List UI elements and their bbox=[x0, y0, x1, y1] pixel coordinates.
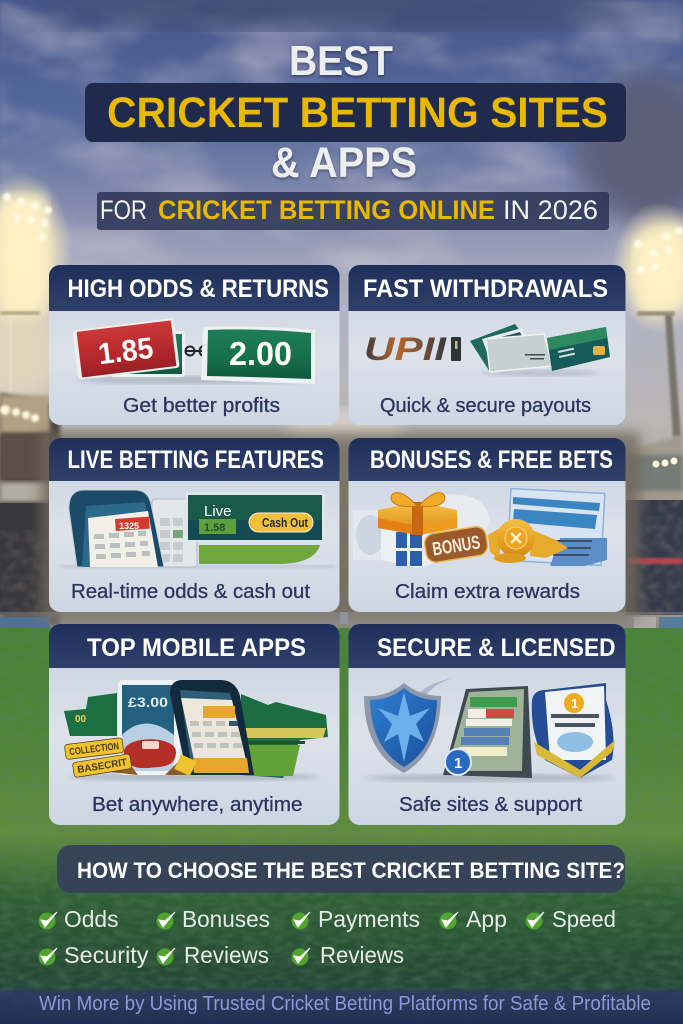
title line: apps: & APPS bbox=[271, 139, 417, 187]
title line: best: BEST bbox=[289, 37, 393, 84]
item: speed bbox=[526, 906, 616, 932]
subtitle banner: FOR bbox=[100, 195, 147, 225]
subtitle banner bbox=[97, 192, 609, 230]
item: app: App bbox=[466, 906, 507, 932]
caption: Claim extra rewards bbox=[395, 581, 580, 603]
icon: phones, tickets and green banners: £3.00 bbox=[128, 694, 168, 710]
icon: shield, checklist and certificate bbox=[364, 678, 615, 782]
caption: Quick & secure payouts bbox=[380, 395, 591, 417]
item: speed: Speed bbox=[552, 906, 616, 932]
item: reviews repeated: Reviews bbox=[320, 942, 404, 968]
item: reviews: Reviews bbox=[184, 942, 269, 968]
left stand bbox=[0, 393, 60, 628]
icon: upi logo and bank cards bbox=[364, 324, 610, 376]
item: app bbox=[440, 906, 507, 932]
caption: Get better profits bbox=[123, 395, 280, 417]
icon: phones, tickets and green banners: BASECRIT bbox=[77, 757, 128, 776]
heading: LIVE BETTING FEATURES bbox=[68, 446, 324, 474]
icon: shield, checklist and certificate: 1 bbox=[454, 755, 462, 772]
icon: odds tickets: 2.00 bbox=[229, 335, 292, 372]
heading: HIGH ODDS & RETURNS bbox=[68, 275, 329, 303]
icon: phone and live odds card: Live bbox=[204, 503, 232, 520]
panel: high odds and returns bbox=[49, 265, 340, 425]
title bbox=[85, 37, 626, 230]
icon: phone and live odds card: 1.58 bbox=[204, 522, 225, 534]
heading: FAST WITHDRAWALS bbox=[363, 275, 608, 303]
heading: TOP MOBILE APPS bbox=[87, 634, 306, 662]
panel: secure and licensed bbox=[348, 624, 626, 825]
item: security: Security bbox=[64, 942, 149, 968]
icon: upi logo and bank cards: UPII bbox=[364, 331, 447, 367]
left floodlight bbox=[0, 172, 72, 395]
icon: phone and live odds card: Cash Out bbox=[262, 515, 309, 530]
subtitle banner: IN 2026 bbox=[503, 195, 598, 225]
how-to-choose banner: HOW TO CHOOSE THE BEST CRICKET BETTING SITE? bbox=[77, 858, 625, 883]
item: odds: Odds bbox=[64, 906, 118, 932]
panel: live betting features bbox=[49, 438, 340, 612]
right stand bbox=[626, 435, 683, 628]
heading: BONUSES & FREE BETS bbox=[370, 446, 613, 474]
icon: phone and live odds card: 1325 bbox=[119, 521, 139, 531]
icon: shield, checklist and certificate: 1 bbox=[571, 696, 578, 711]
item: payments: Payments bbox=[318, 906, 420, 932]
caption: Safe sites & support bbox=[399, 794, 582, 816]
icon: phones, tickets and green banners: 00 bbox=[75, 714, 87, 725]
footer strip: Win More by Using Trusted Cricket Betting Platforms for Safe & Profitable bbox=[39, 993, 651, 1015]
heading: SECURE & LICENSED bbox=[377, 634, 616, 662]
icon: phone and live odds card bbox=[60, 490, 335, 568]
panel: bonuses and free bets bbox=[348, 438, 626, 612]
caption: Bet anywhere, anytime bbox=[92, 794, 302, 816]
subtitle banner: CRICKET BETTING ONLINE bbox=[158, 195, 495, 225]
how-to-choose banner bbox=[57, 845, 625, 893]
item: odds bbox=[38, 906, 118, 932]
icon: phones, tickets and green banners bbox=[64, 680, 328, 781]
right floodlight bbox=[612, 202, 683, 437]
icon: odds tickets: 1.85 bbox=[97, 332, 155, 371]
stand behind panels bbox=[40, 432, 640, 620]
pitch bbox=[0, 628, 683, 1024]
icon: gift box, bonus badge and coin: BONUS bbox=[431, 532, 482, 561]
caption: Real-time odds & cash out bbox=[71, 581, 310, 603]
panel: top mobile apps bbox=[49, 624, 340, 825]
panel: fast withdrawals bbox=[348, 265, 626, 425]
item: bonuses: Bonuses bbox=[182, 906, 270, 932]
checklist bbox=[38, 906, 616, 968]
icon: gift box, bonus badge and coin bbox=[353, 489, 607, 568]
icon: odds tickets bbox=[72, 318, 315, 384]
icon: phones, tickets and green banners: COLLECTION bbox=[69, 741, 120, 758]
footer strip bbox=[0, 990, 683, 1024]
title banner: CRICKET BETTING SITES bbox=[107, 89, 608, 137]
